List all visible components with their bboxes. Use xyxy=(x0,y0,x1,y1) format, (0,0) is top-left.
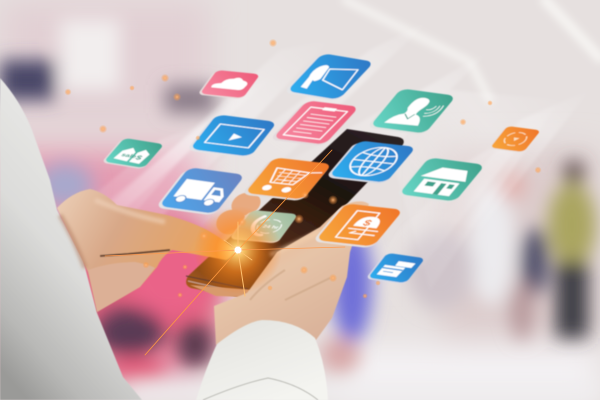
icon: shopping cart xyxy=(241,157,332,201)
icon: sale tags: sale xyxy=(119,153,138,160)
app icons xyxy=(101,53,541,284)
glowing particles xyxy=(63,37,543,300)
icon: video player xyxy=(186,114,277,158)
shirt sleeve xyxy=(0,78,142,400)
icon: cloud xyxy=(197,70,260,99)
icon: delivery truck xyxy=(155,167,245,216)
icon: document clipboard xyxy=(269,100,359,146)
icon: storefront xyxy=(395,157,485,203)
icon: sale tags xyxy=(101,138,164,169)
icon: small orange recycle badge xyxy=(488,126,541,153)
icon: 24 hour phone support: 24 hr xyxy=(261,225,280,230)
icon: small blue card and receipt xyxy=(366,253,425,284)
light beams rising from the phone xyxy=(60,20,590,290)
glowing spark on the fingertip xyxy=(105,150,345,355)
icon: globe xyxy=(325,140,416,184)
left hand with index finger xyxy=(57,189,233,312)
icon: 24 hour phone support xyxy=(229,210,298,244)
icon: call centre agent xyxy=(366,88,456,135)
icon: mobile payment: $ xyxy=(360,218,375,228)
smartphone xyxy=(186,129,404,299)
icon: sale tags: $ xyxy=(133,154,145,161)
right hand holding the phone xyxy=(190,189,369,345)
shirt cuff xyxy=(196,320,328,400)
icon: mobile payment xyxy=(312,203,403,248)
icon: megaphone xyxy=(283,53,374,101)
